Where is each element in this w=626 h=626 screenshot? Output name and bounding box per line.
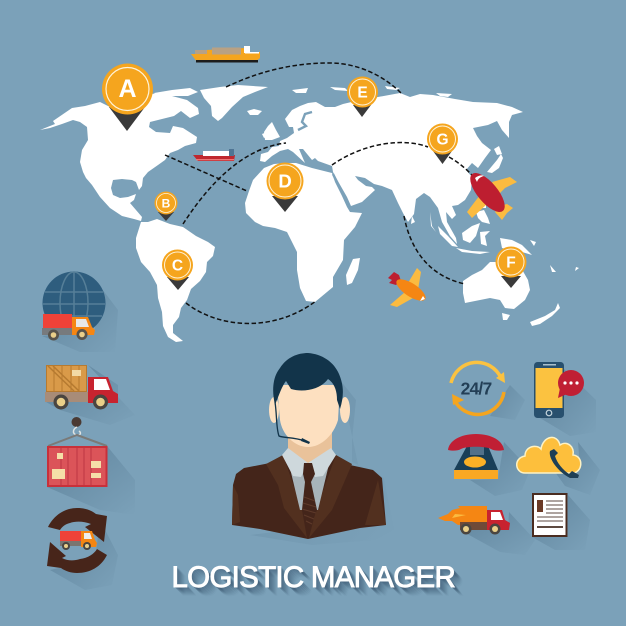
islands xyxy=(264,122,579,326)
face xyxy=(277,385,340,447)
shirt xyxy=(288,460,330,510)
icon: hanging container xyxy=(47,417,135,515)
orange plane xyxy=(388,268,429,307)
pin C xyxy=(162,250,193,290)
dashed routes xyxy=(165,63,472,323)
South America xyxy=(136,219,215,342)
figure shadow xyxy=(250,380,394,545)
logistic manager figure xyxy=(232,353,394,545)
icon: cycle arrows with truck xyxy=(47,508,118,590)
red plane xyxy=(464,168,517,220)
headset xyxy=(275,402,305,441)
hair xyxy=(273,353,343,409)
pin E xyxy=(347,76,378,117)
neck xyxy=(288,428,332,464)
pin F: F xyxy=(506,254,516,272)
pin E: E xyxy=(357,84,368,102)
map water details xyxy=(298,112,348,205)
icon: crate truck xyxy=(45,365,135,425)
suit xyxy=(232,455,386,539)
pin A xyxy=(102,64,153,131)
icon: 24/7 xyxy=(451,362,525,420)
icon: cloud with phone xyxy=(517,437,600,495)
ears xyxy=(269,397,279,423)
pin G xyxy=(427,124,458,164)
pin A: A xyxy=(118,75,137,103)
North America xyxy=(40,93,199,221)
icon: rotary telephone xyxy=(448,434,530,496)
icon: globe with truck xyxy=(42,272,118,352)
pin B: B xyxy=(162,196,171,210)
title: LOGISTIC MANAGER xyxy=(172,561,455,594)
icon: 24/7: 24/7 xyxy=(461,378,491,398)
pin C: C xyxy=(172,258,183,274)
Eurasia xyxy=(260,93,523,244)
collar xyxy=(282,448,308,477)
red ship xyxy=(193,149,235,161)
pin F xyxy=(496,246,526,288)
Africa xyxy=(245,163,362,302)
Greenland and Arctic islands xyxy=(200,85,268,121)
Australia xyxy=(463,258,530,309)
pin G: G xyxy=(436,132,449,148)
pin D: D xyxy=(278,170,292,192)
world map xyxy=(40,85,579,342)
icon: smartphone with chat bubble xyxy=(534,362,596,436)
pin B xyxy=(154,192,178,221)
tie xyxy=(302,463,317,532)
pin D xyxy=(266,162,304,212)
icon: fast truck with flames xyxy=(438,506,535,555)
icon: document xyxy=(532,493,590,550)
top ship xyxy=(191,46,260,62)
